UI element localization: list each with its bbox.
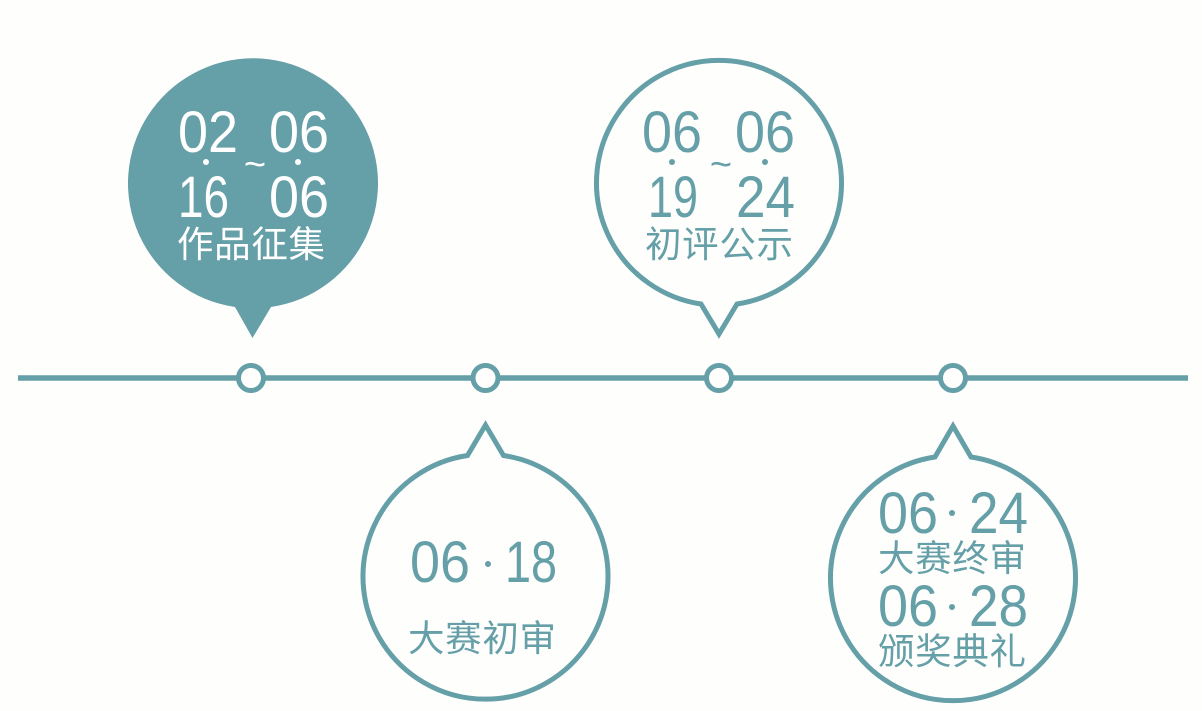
milestone: 初评公示: ~ <box>710 144 732 186</box>
milestone: 初评公示: 06 <box>735 100 795 165</box>
milestone: 大赛终审 and 颁奖典礼: 24 <box>969 481 1028 546</box>
milestone: 大赛初审 <box>363 425 608 699</box>
milestone: 大赛初审: 06 <box>410 530 470 595</box>
milestone: 初评公示: 19 <box>648 165 698 230</box>
milestone: 初评公示: 初评公示 <box>645 224 793 265</box>
milestone: 大赛终审 and 颁奖典礼: 28 <box>969 574 1028 639</box>
milestone: 大赛终审 and 颁奖典礼: 06 <box>878 574 938 639</box>
milestone: 作品征集: 02 <box>178 100 238 165</box>
milestone: 作品征集: 06 <box>269 100 329 165</box>
timeline axis <box>18 375 1188 381</box>
milestone: 大赛初审: 大赛初审 <box>408 618 556 659</box>
milestone: 作品征集: ~ <box>244 144 266 186</box>
milestone: 大赛终审 and 颁奖典礼: 颁奖典礼 <box>878 631 1026 672</box>
milestone: 初评公示: 06 <box>642 100 702 165</box>
milestone: 大赛终审 and 颁奖典礼: 06 <box>878 481 938 546</box>
milestone: 初评公示: 24 <box>736 165 795 230</box>
milestone: 作品征集 <box>128 58 378 338</box>
milestone: 大赛初审: 18 <box>505 530 557 595</box>
timeline nodes <box>238 366 966 390</box>
milestone: 初评公示 <box>596 60 842 334</box>
milestone: 作品征集: 作品征集 <box>177 224 325 265</box>
milestone: 作品征集: 06 <box>269 165 329 230</box>
milestone: 大赛终审 and 颁奖典礼 <box>831 426 1076 701</box>
milestone: 大赛终审 and 颁奖典礼: 大赛终审 <box>878 538 1026 579</box>
milestone: 作品征集: 16 <box>178 165 229 230</box>
